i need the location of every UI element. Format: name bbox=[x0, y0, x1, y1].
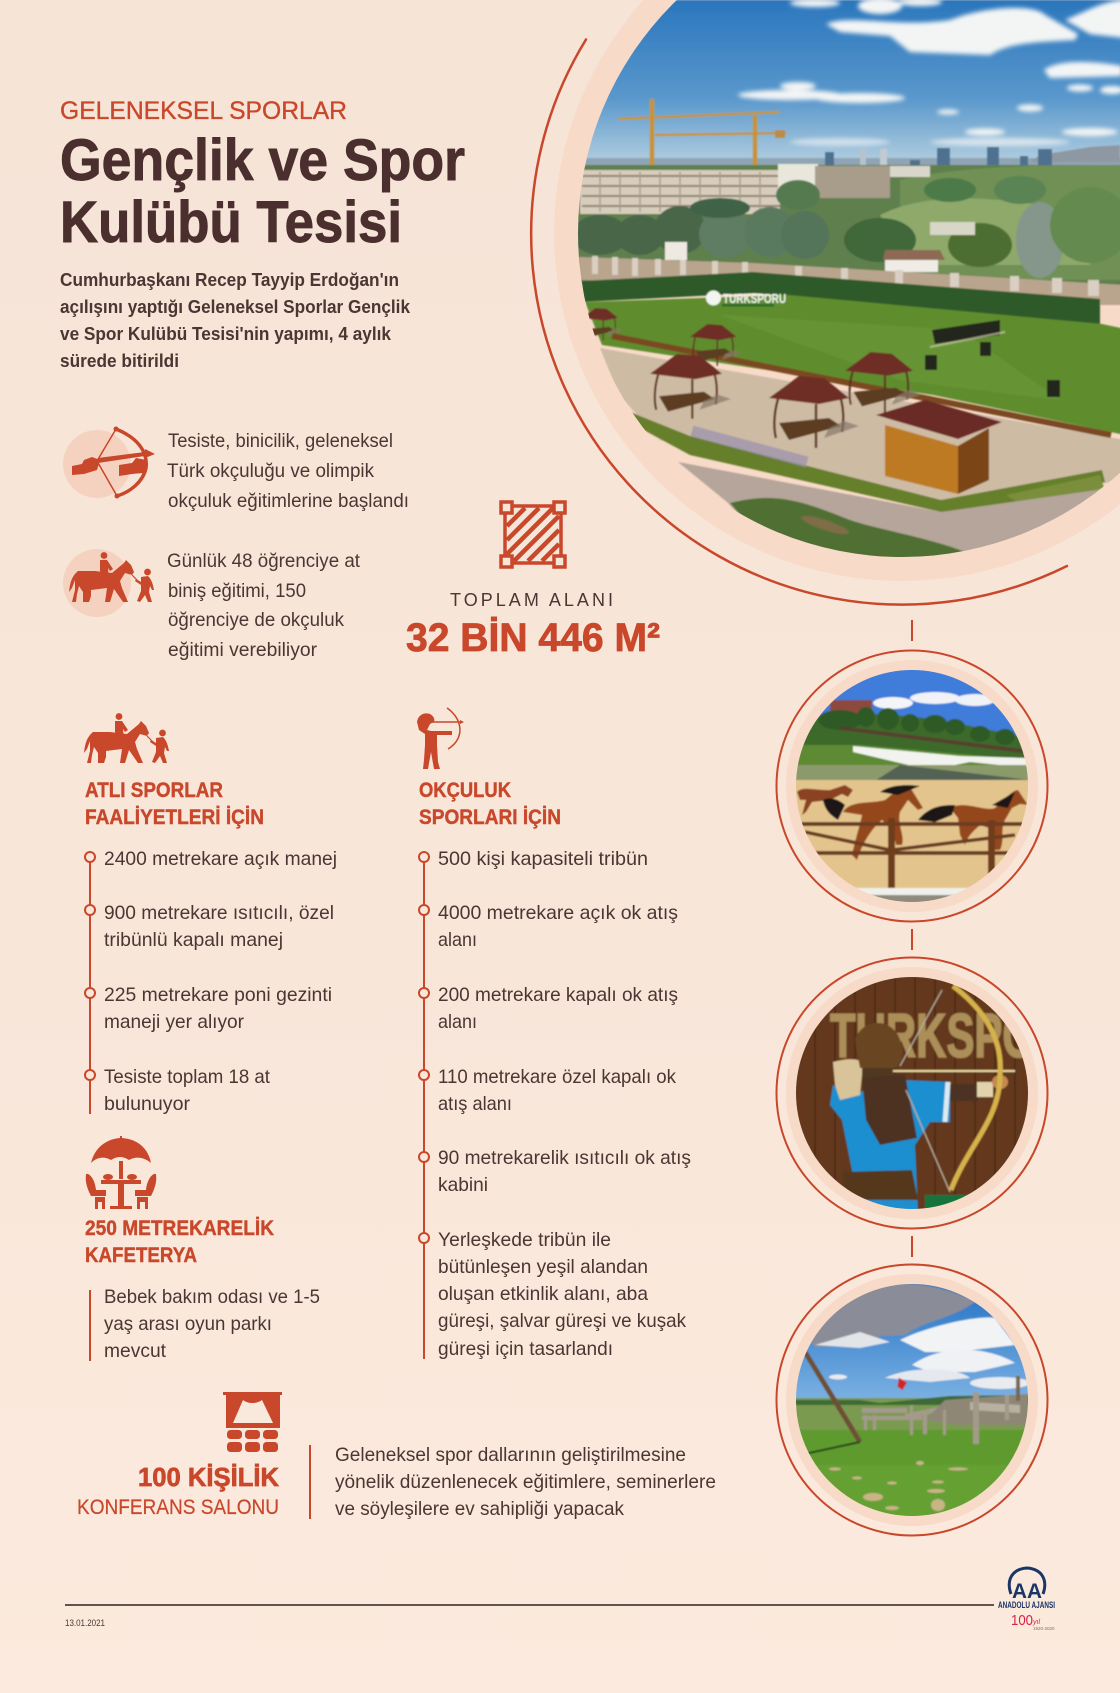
date: 13.01.2021 bbox=[65, 1618, 105, 1628]
title: Gençlik ve Spor bbox=[60, 128, 465, 193]
list: archery facilities: oluşan etkinlik alanı, aba bbox=[438, 1283, 648, 1305]
distant skyline bbox=[585, 158, 1120, 166]
text: archery training: okçuluk eğitimlerine başlandı bbox=[168, 490, 409, 512]
list: archery facilities bbox=[419, 848, 691, 1360]
tree clusters bbox=[572, 176, 1120, 278]
text: conference details: yönelik düzenlenecek eğitimlere, seminerlere bbox=[335, 1471, 716, 1493]
text: archery training bbox=[167, 430, 409, 512]
archery targets bbox=[925, 320, 1060, 397]
text: conference details: ve söyleşilere ev sahipliği yapacak bbox=[335, 1498, 624, 1520]
heading: conference hall: KONFERANS SALONU bbox=[77, 1496, 279, 1519]
decorative red arc bbox=[531, 40, 1067, 605]
list: archery facilities: 200 metrekare kapalı ok atış bbox=[438, 984, 678, 1006]
photo circle: horses bbox=[776, 650, 1048, 922]
text: daily students: eğitimi verebiliyor bbox=[168, 639, 317, 661]
logo: Anadolu Ajansı: yıl bbox=[1032, 1619, 1040, 1626]
icon: archery hands and bow bbox=[63, 426, 155, 498]
text: daily students: Günlük 48 öğrenciye at bbox=[167, 550, 361, 572]
title bbox=[60, 128, 465, 255]
icon: horse riding bbox=[63, 549, 154, 617]
ground bbox=[800, 1429, 1024, 1466]
logo: Anadolu Ajansı: ANADOLU AJANSI bbox=[998, 1600, 1055, 1610]
list: equestrian facilities: 225 metrekare poni gezinti bbox=[104, 984, 332, 1006]
footer rule bbox=[65, 1604, 994, 1606]
heading: conference hall: 100 KİŞİLİK bbox=[138, 1462, 279, 1492]
photo: facility aerial view bbox=[570, 0, 1120, 575]
list: equestrian facilities: Tesiste toplam 18 at bbox=[104, 1066, 271, 1088]
heading: cafeteria bbox=[85, 1217, 274, 1267]
heading: archery bbox=[419, 779, 561, 829]
cranes bbox=[618, 99, 786, 170]
list: archery facilities: bütünleşen yeşil alandan bbox=[438, 1256, 648, 1278]
heading: category label: GELENEKSEL SPORLAR bbox=[60, 97, 347, 125]
intro text block bbox=[60, 269, 411, 371]
list: equestrian facilities: bulunuyor bbox=[104, 1093, 190, 1115]
logo: Anadolu Ajansı: AA bbox=[1012, 1580, 1042, 1603]
building bbox=[580, 170, 780, 214]
timber structures bbox=[862, 1392, 1028, 1444]
list: equestrian facilities bbox=[85, 848, 337, 1115]
heading: archery: SPORLARI İÇİN bbox=[419, 806, 561, 829]
icon: conference stage and seats bbox=[223, 1392, 282, 1452]
text: cafeteria details: mevcut bbox=[104, 1340, 167, 1362]
garden beds bbox=[630, 412, 1105, 512]
text: cafeteria details: yaş arası oyun parkı bbox=[104, 1313, 272, 1335]
text: conference details: Geleneksel spor dallarının geliştirilmesine bbox=[335, 1444, 686, 1466]
pale ring bbox=[554, 0, 1120, 581]
list: equestrian facilities: maneji yer alıyor bbox=[104, 1011, 244, 1033]
text: daily students: öğrenciye de okçuluk bbox=[168, 609, 344, 631]
list: archery facilities: güreşi için tasarlandı bbox=[438, 1338, 613, 1360]
text: conference details bbox=[310, 1444, 716, 1520]
photo circle: wooden obstacle park bbox=[776, 1264, 1048, 1536]
fence wall bbox=[579, 257, 1120, 305]
hero photo with rings bbox=[531, 0, 1120, 605]
list: equestrian facilities: 900 metrekare ısıtıcılı, özel bbox=[104, 902, 334, 924]
wood fence bbox=[612, 336, 1111, 435]
list: archery facilities: 110 metrekare özel kapalı ok bbox=[438, 1066, 676, 1088]
heading: equestrian: ATLI SPORLAR bbox=[85, 779, 223, 802]
wooden cabin bbox=[885, 425, 958, 494]
hedge bbox=[582, 272, 1100, 324]
photo circle: traditional archer bbox=[776, 958, 1048, 1228]
title: Kulübü Tesisi bbox=[60, 190, 402, 255]
list: archery facilities: güreşi, şalvar güreşi ve kuşak bbox=[438, 1310, 686, 1332]
lawn bbox=[585, 295, 1120, 436]
list: archery facilities: 4000 metrekare açık ok atış bbox=[438, 902, 678, 924]
icon: cafeteria umbrella and table bbox=[86, 1136, 156, 1209]
gazebos bbox=[588, 308, 622, 341]
icon: archer section bbox=[417, 708, 464, 769]
heading: equestrian bbox=[85, 779, 264, 829]
list: archery facilities: alanı bbox=[438, 929, 477, 951]
white small buildings bbox=[885, 260, 938, 272]
list: equestrian facilities: 2400 metrekare açık manej bbox=[104, 848, 337, 870]
heading: cafeteria: 250 METREKARELİK bbox=[85, 1217, 274, 1240]
intro text block: ve Spor Kulübü Tesisi'nin yapımı, 4 aylık bbox=[60, 323, 392, 344]
list: equestrian facilities: tribünlü kapalı manej bbox=[104, 929, 283, 951]
icon: total area bbox=[501, 502, 565, 567]
paddock fence bbox=[800, 824, 1025, 853]
intro text block: Cumhurbaşkanı Recep Tayyip Erdoğan'ın bbox=[60, 269, 399, 290]
text: cafeteria details bbox=[90, 1286, 320, 1362]
icon: horse section bbox=[84, 713, 169, 763]
list: archery facilities: 90 metrekarelik ısıtıcılı ok atış bbox=[438, 1147, 691, 1169]
intro text block: sürede bitirildi bbox=[60, 350, 179, 371]
horses in paddock bbox=[797, 785, 1028, 860]
logo: Anadolu Ajansı: 1920-2020 bbox=[1033, 1626, 1055, 1631]
logo: Anadolu Ajansı bbox=[998, 1568, 1055, 1631]
connector ticks bbox=[911, 620, 913, 1257]
heading: cafeteria: KAFETERYA bbox=[85, 1244, 197, 1267]
heading: equestrian: FAALİYETLERİ İÇİN bbox=[85, 806, 264, 829]
archer figure bbox=[830, 1080, 950, 1215]
label: total area: TOPLAM ALANI bbox=[450, 590, 613, 610]
text: daily students bbox=[167, 550, 361, 661]
list: archery facilities: 500 kişi kapasiteli tribün bbox=[438, 848, 648, 870]
path and lower garden bbox=[678, 462, 1100, 552]
paving bbox=[600, 348, 1120, 508]
text: cafeteria details: Bebek bakım odası ve 1-5 bbox=[104, 1286, 320, 1308]
text: archery training: Tesiste, binicilik, geleneksel bbox=[168, 430, 393, 452]
stat: total area value: 32 BİN 446 M² bbox=[406, 616, 660, 660]
list: archery facilities: Yerleşkede tribün ile bbox=[438, 1229, 611, 1251]
list: archery facilities: alanı bbox=[438, 1011, 477, 1033]
list: archery facilities: atış alanı bbox=[438, 1093, 512, 1115]
logo: Anadolu Ajansı: 100 bbox=[1011, 1612, 1033, 1629]
heading: conference hall bbox=[77, 1462, 279, 1519]
heading: archery: OKÇULUK bbox=[419, 779, 511, 802]
text: archery training: Türk okçuluğu ve olimpik bbox=[167, 460, 374, 482]
trees and mid ground bbox=[570, 165, 1120, 285]
list: archery facilities: kabini bbox=[438, 1174, 488, 1196]
TURKSPORU sign: TURKSPORU bbox=[723, 292, 786, 306]
text: daily students: biniş eğitimi, 150 bbox=[168, 580, 306, 602]
intro text block: açılışını yaptığı Geleneksel Sporlar Gençlik bbox=[60, 296, 411, 317]
